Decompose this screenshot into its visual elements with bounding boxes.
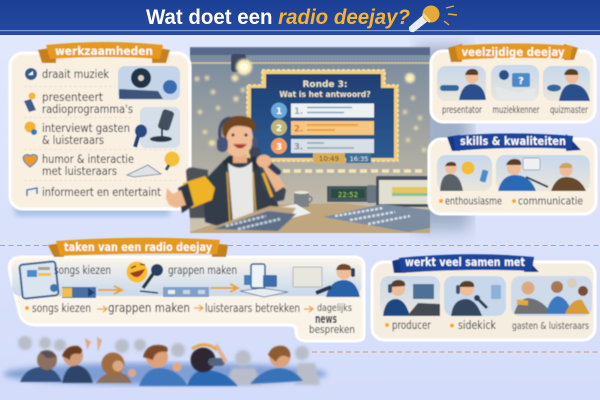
icon: tablet (19, 261, 59, 299)
mixing console right (323, 204, 430, 232)
portrait: quizmaster (543, 66, 590, 101)
icon: news sheet (293, 267, 322, 287)
item: interviewt gasten & luisteraars: interviewt gasten (42, 121, 130, 135)
desk (190, 203, 430, 233)
item: humor & interactie met luisteraars: humor & interactie (42, 152, 134, 166)
answer 2 (271, 120, 374, 136)
shirt (228, 162, 254, 224)
ribbon: werkzaamheden: werkzaamheden (55, 44, 153, 58)
panel: skills & kwaliteiten (429, 134, 596, 214)
portrait: presentator (437, 66, 486, 101)
workflow labels: grappen maken (108, 301, 190, 315)
illustration strip (12, 262, 361, 296)
deejay character (166, 116, 296, 232)
face (223, 119, 253, 157)
panel: veelzijdige deejay (431, 44, 595, 122)
ribbon: veelzijdige deejay: veelzijdige deejay (462, 45, 565, 59)
timer: 10:49 (319, 155, 339, 163)
workflow labels: bespreken (309, 324, 355, 336)
item: presenteert radioprogramma's (24, 90, 133, 116)
item: humor & interactie met luisteraars: met luisteraars (42, 164, 117, 178)
item: interviewt gasten & luisteraars: & luisteraars (42, 133, 104, 147)
answer 2: 2 (276, 124, 282, 134)
portrait: sidekick (444, 276, 506, 316)
text: songs kiezen top: songs kiezen (54, 263, 111, 277)
portrait: producer (380, 276, 440, 316)
arrow 2 (210, 284, 238, 292)
answer 1: 1. (294, 107, 303, 117)
text: grappen maken top: grappen maken (168, 263, 237, 277)
answer 1 (271, 102, 374, 118)
mixing console left (213, 211, 296, 231)
item: humor & interactie met luisteraars (23, 152, 134, 178)
studio lights (195, 74, 426, 152)
item: interviewt gasten & luisteraars (24, 121, 130, 147)
open hand (166, 188, 186, 208)
ribbon: veelzijdige deejay (448, 44, 578, 62)
item: presenteert radioprogramma's: presenteert (42, 90, 103, 104)
hair (222, 116, 256, 139)
illustration: enthousiasme (437, 155, 492, 191)
arrow 1 (98, 286, 122, 294)
media bar middle (163, 287, 209, 297)
desk edge (200, 206, 296, 232)
jacket (203, 156, 279, 226)
panel: werkt veel samen met (372, 254, 595, 340)
icon: golden microphone (409, 6, 457, 32)
eyes and smile (232, 134, 248, 148)
portrait: muziekkenner: ? (518, 76, 524, 87)
ribbon: taken van een radio deejay: taken van een radio deejay (64, 240, 212, 254)
ribbon: skills & kwaliteiten: skills & kwaliteiten (460, 134, 566, 148)
yellow sleeve (183, 176, 215, 208)
label: presentator: presentator (442, 105, 482, 116)
media bar left (62, 287, 96, 298)
workflow labels: songs kiezen (32, 301, 91, 315)
spotlight left (231, 54, 252, 75)
crowd illustration (3, 336, 327, 386)
timer: 16:35 (350, 155, 368, 163)
screen question: Wat is het antwoord? (279, 90, 371, 99)
panel: werkzaamheden (10, 42, 190, 216)
workflow labels (25, 301, 355, 336)
illustration: communicatie (496, 155, 590, 191)
icon: book and devices (240, 264, 288, 297)
chair (186, 167, 208, 218)
answer 2: 2. (294, 124, 303, 134)
hand (256, 154, 272, 168)
portrait: deejay with mic (316, 264, 360, 297)
workflow labels: news (315, 312, 337, 326)
label: producer: producer (392, 318, 431, 332)
spotlight right (405, 73, 415, 83)
ribbon: werkt veel samen met (392, 254, 539, 273)
label: enthousiasme: enthousiasme (445, 196, 502, 208)
ribbon: taken van een radio deejay (48, 238, 228, 257)
icon: laughing emoji (126, 262, 148, 282)
label: muziekkenner: muziekkenner (492, 105, 540, 116)
icon: microphone (140, 264, 163, 293)
sleeve accent (263, 173, 272, 197)
ribbon: werkzaamheden (38, 42, 170, 63)
quiz screen (247, 70, 398, 163)
item: presenteert radioprogramma's: radioprogramma's (42, 102, 133, 116)
clock device: 22:52 (338, 191, 358, 199)
clock device (327, 185, 376, 203)
label: producer (385, 318, 431, 332)
portrait: gasten & luisteraars (511, 276, 592, 316)
light strip (283, 169, 425, 173)
neck (233, 150, 247, 163)
answer 3: 3 (276, 142, 282, 152)
right upper arm (258, 162, 286, 202)
dark cuff (178, 183, 194, 213)
title: Wat doet een radio deejay? (146, 5, 410, 29)
forearm (262, 160, 285, 192)
hood (223, 155, 259, 170)
studio haze (415, 45, 470, 230)
screen title: Ronde 3: (302, 80, 348, 90)
timer (313, 153, 371, 163)
notes paper (271, 204, 311, 219)
header banner (0, 0, 600, 35)
item: informeert en entertaint: informeert en entertaint (42, 185, 161, 199)
portrait: muziekkenner (491, 65, 539, 101)
ribbon: werkt veel samen met: werkt veel samen met (405, 255, 525, 269)
item: draait muziek: draait muziek (42, 67, 109, 81)
label: communicatie: communicatie (518, 196, 583, 208)
headphones (217, 118, 258, 152)
answer 3 (271, 138, 374, 154)
panel: taken van een radio deejay (9, 238, 364, 341)
monitor (376, 176, 430, 207)
icon: turntable (118, 66, 180, 100)
answer 1: 1 (276, 107, 282, 117)
answer 3: 3. (294, 142, 303, 152)
icon: book and lightbulb (127, 152, 180, 177)
workflow labels: dagelijks (317, 303, 352, 314)
icon: microphones (135, 107, 180, 148)
workflow labels: luisteraars betrekken (205, 301, 300, 315)
coffee mug (294, 191, 312, 207)
jacket trim (227, 172, 256, 222)
handheld microphone (249, 147, 278, 172)
dashed section dividers (0, 246, 600, 352)
label: sidekick: sidekick (458, 318, 496, 332)
